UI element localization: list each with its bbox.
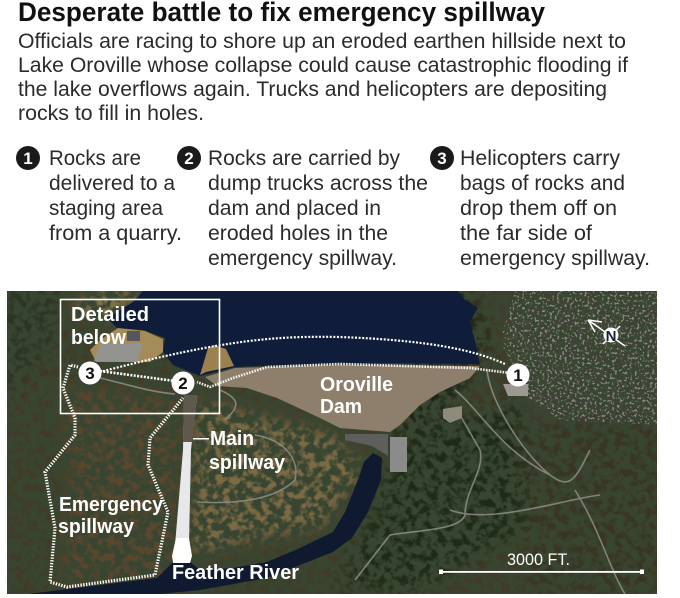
- badge 3: [430, 146, 454, 170]
- step 1: delivered to a: [49, 171, 175, 195]
- badge 1: [16, 146, 40, 170]
- step 2: [177, 146, 428, 270]
- route: helicopter flight: [100, 337, 505, 372]
- step 2: Rocks are carried by: [208, 146, 400, 170]
- dam face: [205, 365, 480, 432]
- step 3: drop them off on: [460, 196, 617, 220]
- intro text: [18, 29, 628, 125]
- roads: [100, 370, 625, 594]
- step 1: Rocks are: [49, 146, 141, 170]
- lake: [107, 291, 480, 376]
- powerhouse: [345, 384, 528, 472]
- step 1: from a quarry.: [49, 221, 182, 245]
- label: emergency spillway: Emergency: [59, 494, 164, 516]
- intro text: rocks to fill in holes.: [18, 101, 204, 125]
- badge 2: 2: [184, 149, 194, 168]
- badge 2: [177, 146, 201, 170]
- intro text: Lake Oroville whose collapse could cause catastrophic flooding if: [18, 53, 628, 77]
- label: detailed below: Detailed: [71, 304, 149, 326]
- detail box: [60, 300, 220, 414]
- step 3: emergency spillway.: [460, 246, 650, 270]
- step 2: eroded holes in the: [208, 221, 388, 245]
- badge 1: 1: [23, 149, 33, 168]
- label: Feather River: Feather River: [172, 562, 299, 584]
- shore and parking: [90, 328, 163, 362]
- main spillway: [172, 395, 197, 563]
- badge 3: 3: [437, 149, 447, 168]
- step 1: [16, 146, 182, 245]
- marker 1: [506, 364, 530, 386]
- emergency spillway outline: [45, 365, 183, 587]
- label: emergency spillway: [58, 497, 163, 537]
- peninsula: [200, 345, 234, 375]
- label: main spillway: [193, 428, 286, 474]
- map labels: [58, 304, 393, 584]
- aerial map: [0, 280, 660, 594]
- step 3: bags of rocks and: [460, 171, 625, 195]
- step 2: emergency spillway.: [208, 246, 397, 270]
- north arrow: [588, 320, 625, 346]
- north arrow: N: [606, 328, 616, 345]
- label: emergency spillway: spillway: [58, 516, 135, 538]
- label: detailed below: below: [71, 327, 126, 349]
- step 3: the far side of: [460, 221, 592, 245]
- route: dam road: [197, 364, 518, 387]
- marker 1: 1: [513, 366, 523, 385]
- route: staging to spillway: [100, 371, 175, 381]
- intro text: the lake overflows again. Trucks and helicopters are depositing: [18, 77, 607, 101]
- label: main spillway: Main: [210, 428, 254, 450]
- scale bar: [439, 554, 644, 574]
- step 2: dump trucks across the: [208, 171, 428, 195]
- river: [28, 453, 382, 594]
- marker 2: 2: [178, 374, 188, 393]
- step 1: staging area: [49, 196, 163, 220]
- label: main spillway: spillway: [209, 452, 286, 474]
- step 2: dam and placed in: [208, 196, 381, 220]
- label: Oroville Dam: [320, 376, 392, 413]
- label: Oroville Dam: Oroville: [320, 374, 393, 396]
- step 3: Helicopters carry: [460, 146, 620, 170]
- label: detailed below: [72, 306, 148, 344]
- marker 2: [172, 372, 194, 394]
- step 3: [430, 146, 650, 270]
- marker 3: [78, 362, 102, 384]
- scale bar: 3000 FT.: [507, 550, 570, 569]
- label: Oroville Dam: Dam: [320, 396, 362, 418]
- intro text: Officials are racing to shore up an eroded earthen hillside next to: [18, 29, 626, 53]
- marker 3: 3: [85, 364, 95, 383]
